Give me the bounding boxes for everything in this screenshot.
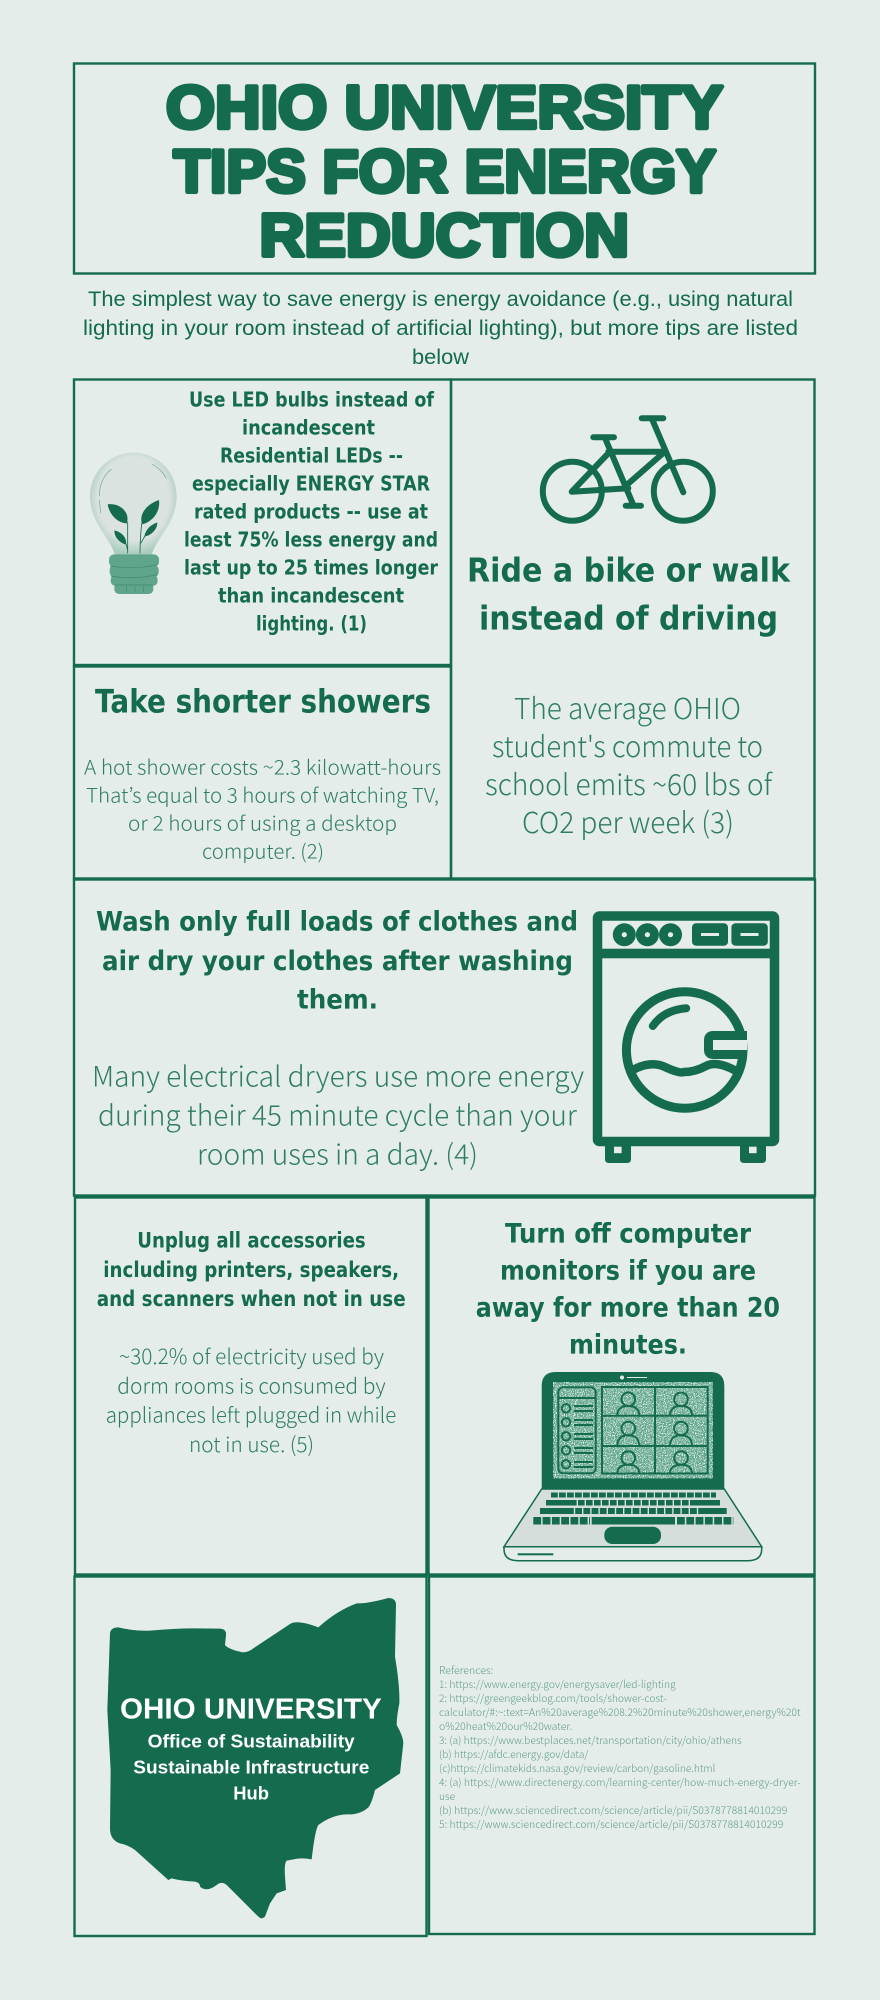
laundry text: Many electrical dryers use more energy	[92, 1056, 584, 1096]
references text: References:	[439, 1663, 493, 1678]
icon: washing machine	[598, 916, 774, 1163]
bike heading: Ride a bike or walk	[467, 551, 791, 590]
bike text: student's commute to	[492, 724, 763, 766]
unplug text	[106, 1341, 396, 1459]
panel: bike	[451, 380, 814, 878]
bike text: CO2 per week (3)	[522, 800, 734, 842]
references text	[439, 1663, 801, 1832]
unplug text: ~30.2% of electricity used by	[119, 1341, 384, 1371]
bike text: The average OHIO	[514, 686, 741, 728]
intro text: lighting in your room instead of artificial lighting), but more tips are listed	[83, 317, 798, 340]
showers text: A hot shower costs ~2.3 kilowatt-hours	[84, 752, 441, 781]
references text: 4: (a) https://www.directenergy.com/learning-center/how-much-energy-dryer-	[439, 1775, 801, 1790]
LED tip text	[184, 388, 438, 636]
panel: showers	[74, 666, 451, 878]
icon: light bulb with leaves	[90, 453, 177, 594]
monitors heading	[476, 1219, 780, 1360]
references text: (c)https://climatekids.nasa.gov/review/carbon/gasoline.html	[439, 1761, 715, 1776]
LED tip text: least 75% less energy and	[184, 528, 438, 552]
LED tip text: Use LED bulbs instead of	[189, 388, 434, 412]
showers text: computer. (2)	[202, 836, 324, 865]
LED tip text: especially ENERGY STAR	[192, 472, 430, 496]
laundry text: during their 45 minute cycle than your	[98, 1095, 578, 1135]
laundry text	[92, 1056, 584, 1174]
icon: bicycle	[543, 418, 713, 521]
title: REDUCTION	[260, 202, 629, 269]
laundry heading: air dry your clothes after washing	[102, 946, 573, 977]
showers text: or 2 hours of using a desktop	[128, 808, 397, 837]
logo text: OHIO UNIVERSITY	[120, 1693, 382, 1725]
laundry heading: them.	[297, 984, 378, 1015]
references text: 1: https://www.energy.gov/energysaver/led-lighting	[439, 1677, 676, 1692]
LED tip text: Residential LEDs --	[220, 444, 403, 468]
panel: LED bulbs	[74, 380, 451, 665]
references text: 5: https://www.sciencedirect.com/science/article/pii/S0378778814010299	[439, 1817, 784, 1832]
unplug heading: Unplug all accessories	[137, 1229, 366, 1253]
laundry heading	[96, 907, 578, 1015]
monitors heading: away for more than 20	[476, 1292, 780, 1323]
logo text: Sustainable Infrastructure	[133, 1757, 369, 1778]
panel: references	[429, 1576, 814, 1934]
bike heading: instead of driving	[479, 599, 778, 638]
bike heading	[467, 551, 791, 638]
logo text	[120, 1693, 382, 1804]
title: OHIO UNIVERSITY	[166, 74, 723, 141]
unplug text: appliances left plugged in while	[106, 1400, 396, 1430]
references text: (b) https://www.sciencedirect.com/science/article/pii/S0378778814010299	[439, 1803, 788, 1818]
showers text: That’s equal to 3 hours of watching TV,	[86, 780, 439, 809]
intro text	[83, 288, 798, 369]
showers heading: Take shorter showers	[95, 683, 431, 721]
intro text: below	[412, 346, 470, 369]
laundry heading: Wash only full loads of clothes and	[96, 907, 578, 938]
references text: 3: (a) https://www.bestplaces.net/transportation/city/ohio/athens	[439, 1733, 742, 1748]
showers text	[84, 752, 441, 865]
logo text: Office of Sustainability	[148, 1731, 355, 1752]
unplug heading: and scanners when not in use	[97, 1287, 406, 1311]
LED tip text: than incandescent	[218, 584, 404, 608]
unplug heading	[97, 1229, 406, 1311]
laundry text: room uses in a day. (4)	[197, 1134, 478, 1174]
panel: unplug	[75, 1198, 426, 1574]
unplug heading: including printers, speakers,	[103, 1258, 399, 1282]
title panel	[74, 64, 815, 274]
panel: Ohio University logo	[74, 1576, 426, 1936]
icon: Ohio map	[107, 1598, 403, 1918]
LED tip text: last up to 25 times longer	[184, 556, 438, 580]
logo text: Hub	[233, 1783, 269, 1804]
title: TIPS FOR ENERGY	[174, 138, 716, 205]
intro text: The simplest way to save energy is energy avoidance (e.g., using natural	[88, 288, 793, 311]
unplug text: not in use. (5)	[189, 1429, 314, 1459]
bike text	[485, 686, 773, 842]
LED tip text: rated products -- use at	[194, 500, 428, 524]
unplug text: dorm rooms is consumed by	[117, 1370, 386, 1400]
references text: calculator/#:~:text=An%20average%208.2%20minute%20shower,energy%20t	[439, 1705, 801, 1720]
LED tip text: incandescent	[242, 416, 375, 440]
references text: use	[439, 1789, 455, 1804]
LED tip text: lighting. (1)	[256, 612, 367, 636]
panel: laundry	[74, 880, 815, 1196]
references text: 2: https://greengeekblog.com/tools/shower-cost-	[439, 1691, 667, 1706]
monitors heading: monitors if you are	[500, 1255, 756, 1286]
references text: o%20heat%20our%20water.	[439, 1719, 572, 1734]
monitors heading: Turn off computer	[505, 1219, 752, 1250]
monitors heading: minutes.	[569, 1329, 687, 1360]
bike text: school emits ~60 lbs of	[485, 762, 773, 804]
title	[166, 74, 723, 269]
icon: laptop	[504, 1372, 762, 1561]
panel: monitors	[428, 1198, 814, 1574]
references text: (b) https://afdc.energy.gov/data/	[439, 1747, 589, 1762]
